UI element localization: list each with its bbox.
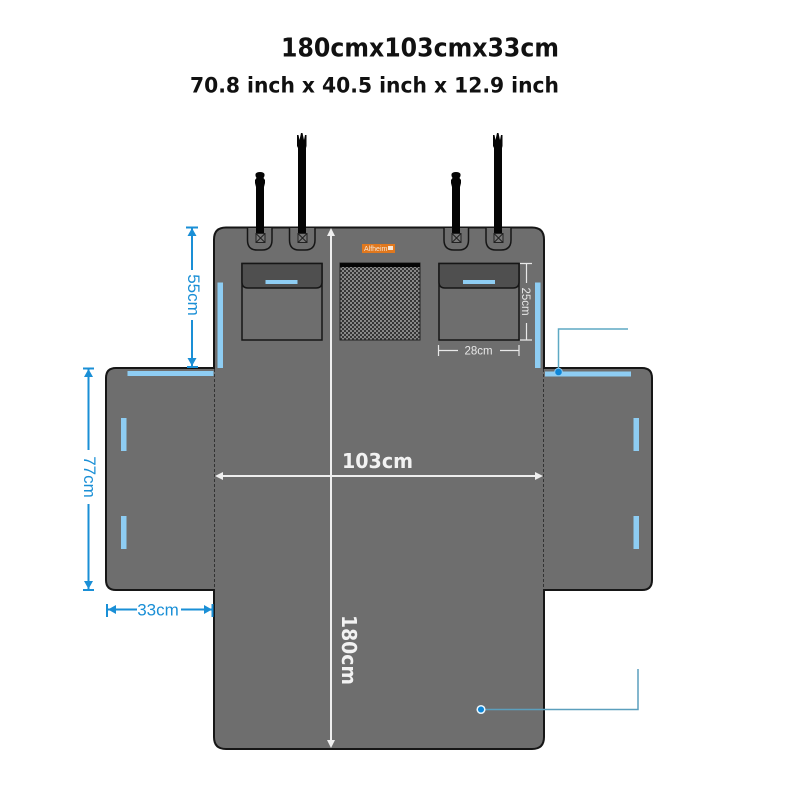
blue velcro strips bbox=[121, 282, 639, 549]
strap 3 bbox=[451, 172, 461, 234]
length arrow 180cm bbox=[327, 228, 361, 748]
tab 4 bbox=[486, 228, 511, 250]
straps bbox=[255, 133, 502, 234]
buckle 4 bbox=[494, 234, 503, 242]
dimension 77cm bbox=[80, 368, 99, 590]
dimension 33cm bbox=[107, 600, 212, 620]
callout line: mat surface bbox=[477, 669, 638, 713]
pocket width dimension 28cm bbox=[438, 345, 519, 358]
right pocket bbox=[439, 264, 519, 340]
pocket width dimension 28cm: 28cm bbox=[464, 346, 493, 358]
tab buckles bbox=[256, 234, 503, 242]
strap 2 bbox=[297, 133, 306, 234]
dimension 55cm: 55cm bbox=[184, 274, 203, 316]
dimension 33cm: 33cm bbox=[137, 600, 179, 620]
tab 3 bbox=[444, 228, 468, 250]
dimension 77cm: 77cm bbox=[80, 456, 99, 498]
mat body with side wings bbox=[106, 228, 652, 749]
dimension 55cm bbox=[184, 228, 203, 367]
label 103cm: 103cm bbox=[342, 449, 413, 473]
subtitle: inch dimensions: 70.8 inch x 40.5 inch x 12.9 inch bbox=[190, 74, 559, 98]
left pocket flap bbox=[242, 264, 322, 288]
buckle 1 bbox=[256, 234, 265, 242]
mesh pocket bbox=[340, 263, 420, 340]
tab 1 bbox=[248, 228, 272, 250]
anchor tabs bbox=[248, 228, 511, 250]
buckle 2 bbox=[298, 234, 307, 242]
fold seams bbox=[214, 369, 544, 589]
tab 2 bbox=[290, 228, 315, 250]
buckle 3 bbox=[452, 234, 461, 242]
brand label: Alfheim bbox=[364, 246, 388, 253]
left pocket bbox=[242, 264, 322, 340]
title: metric dimensions: 180cmx103cmx33cm bbox=[281, 34, 559, 64]
right pocket flap bbox=[439, 264, 519, 288]
pocket height dimension 25cm bbox=[519, 264, 532, 340]
callout line: side velcro bbox=[555, 329, 628, 376]
label 180cm: 180cm bbox=[337, 615, 361, 685]
strap 1 bbox=[255, 172, 265, 234]
width arrow 103cm bbox=[215, 449, 543, 480]
right flap strip bbox=[463, 280, 495, 284]
left flap strip bbox=[266, 280, 298, 284]
strap 4 bbox=[493, 133, 502, 234]
pocket height dimension 25cm: 25cm bbox=[519, 287, 531, 316]
brand label bbox=[362, 244, 395, 253]
